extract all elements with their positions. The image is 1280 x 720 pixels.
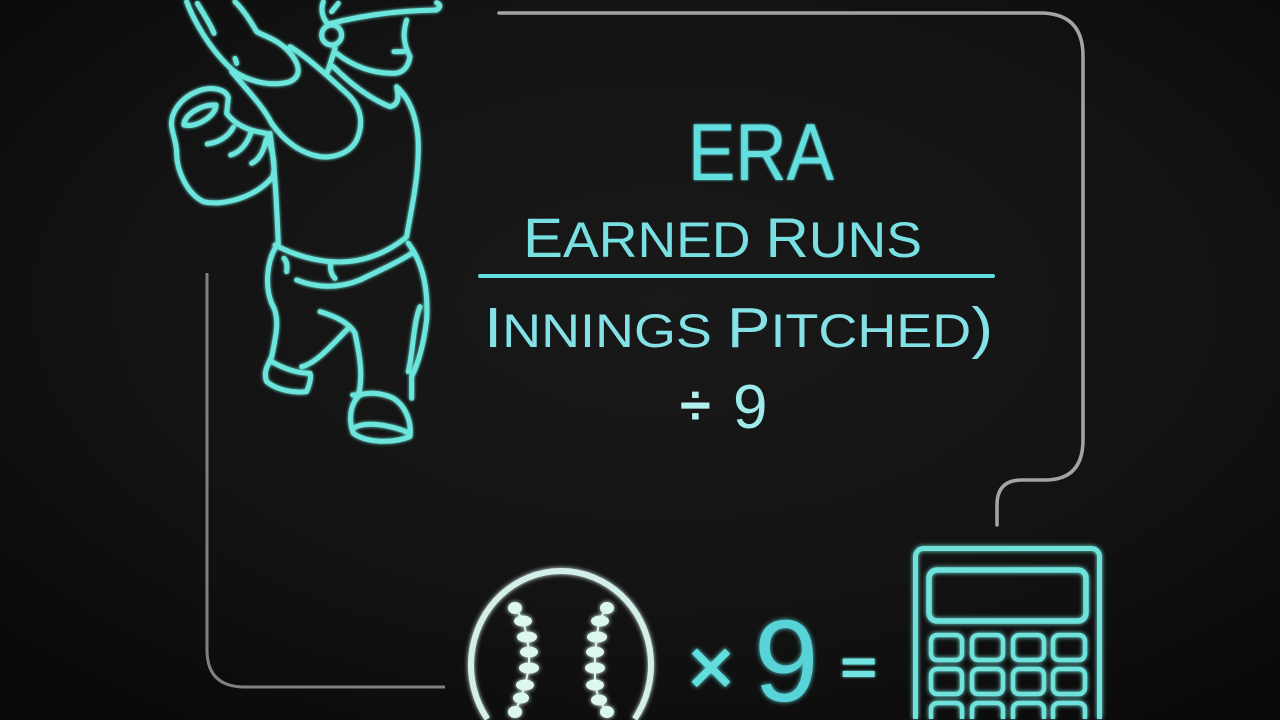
calculator body <box>916 548 1100 719</box>
torso <box>270 88 418 243</box>
face and collar <box>328 20 410 107</box>
glove <box>171 89 274 203</box>
connector: top bracket from pitcher to calculator <box>499 13 1083 525</box>
connector: left bracket from pitcher to baseball <box>207 273 445 687</box>
belt <box>275 238 412 286</box>
calculator screen <box>929 570 1086 621</box>
title: ERA: ERA <box>688 108 834 198</box>
right leg <box>408 243 427 398</box>
right stitches <box>586 603 613 717</box>
fraction bar <box>478 274 995 278</box>
equals sign: = <box>841 642 876 693</box>
shoulder and chest <box>232 47 361 157</box>
icon: neon pitcher figure <box>171 2 440 441</box>
ear <box>322 25 342 45</box>
ball outline <box>471 571 651 719</box>
raised arm <box>187 2 298 84</box>
divide by 9: ÷ <box>680 373 711 436</box>
divide by 9: 9 <box>733 373 767 442</box>
trouser creases <box>302 312 361 395</box>
numerator: earned runs: EARNED RUNS <box>523 206 922 269</box>
calculator keys <box>931 635 1085 719</box>
shoe <box>351 393 410 441</box>
icon: calculator <box>916 548 1100 719</box>
glove details <box>184 105 266 163</box>
cap <box>322 2 440 24</box>
multiply sign: × <box>687 622 735 713</box>
left leg and cuff <box>265 248 311 392</box>
denominator: innings pitched: INNINGS PITCHED ) <box>484 296 993 360</box>
icon: baseball <box>471 571 651 719</box>
formula text block <box>478 108 995 442</box>
arm detail <box>197 3 237 63</box>
left stitches <box>509 603 538 717</box>
